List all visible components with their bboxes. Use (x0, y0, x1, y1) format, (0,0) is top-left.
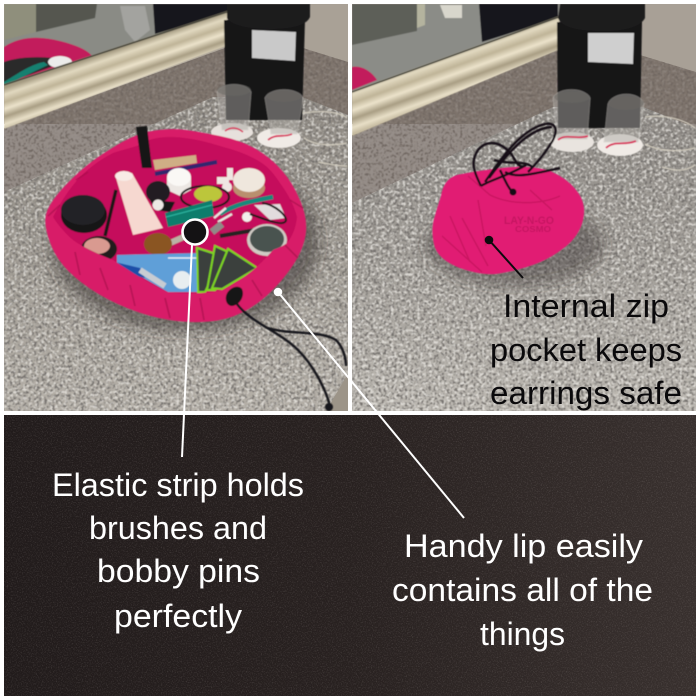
backsplash (352, 50, 696, 203)
small black jar (146, 181, 170, 203)
text: internal zip pocket: earrings safe (490, 375, 682, 411)
bag folds (442, 176, 560, 272)
mirror frame (4, 11, 227, 129)
embossed logo: LAY-N-GO (504, 215, 554, 227)
yellow item (194, 186, 222, 202)
text: elastic strip: perfectly (114, 598, 242, 634)
text: handy lip: Handy lip easily (404, 528, 643, 564)
panel: closed bag photo (352, 4, 696, 411)
bag interior (53, 137, 297, 293)
bag shadow (425, 203, 605, 287)
charger cable (303, 112, 347, 166)
countertop (4, 97, 348, 411)
text: elastic strip: Elastic strip holds (52, 467, 304, 503)
black compact (60, 206, 108, 234)
embossed logo (504, 215, 554, 234)
bag contents (61, 155, 287, 292)
teal tool (220, 197, 273, 214)
lip folds (48, 172, 303, 320)
drinking glasses (211, 84, 303, 148)
powder compact (232, 184, 266, 199)
panel: open bag photo (4, 4, 348, 411)
tan tube (153, 155, 197, 170)
counter front corner (326, 374, 348, 411)
drinking glasses (550, 90, 644, 156)
text: handy lip: things (480, 616, 565, 652)
dark cord (250, 203, 286, 223)
white jar (167, 178, 191, 196)
blush (81, 236, 117, 262)
closed pink bag (432, 167, 584, 274)
dark loop (181, 186, 229, 208)
blue tube (115, 262, 145, 278)
blue card (117, 253, 200, 292)
wall (4, 4, 348, 124)
green case (165, 200, 214, 227)
black drawstring (474, 124, 560, 194)
reflected pink bag (352, 67, 377, 90)
countertop (352, 107, 696, 411)
text: internal zip pocket: Internal zip (503, 288, 669, 324)
text: elastic strip: brushes and (89, 510, 267, 546)
callout: elastic strip marker and leader (182, 220, 208, 457)
coffee maker (557, 4, 645, 128)
text: handy lip (392, 528, 653, 652)
black pencil (105, 190, 116, 236)
purple pen (155, 162, 217, 174)
coffee maker (224, 4, 310, 120)
text: elastic strip: bobby pins (97, 553, 260, 589)
white pills (217, 168, 233, 184)
text: internal zip pocket (490, 288, 682, 411)
makeup brush (170, 236, 186, 243)
text: elastic strip (52, 467, 304, 634)
bag shadow (50, 152, 320, 332)
mirror frame (352, 16, 559, 136)
text: handy lip: contains all of the (392, 572, 653, 608)
open pink bag (45, 126, 306, 322)
wall (352, 4, 696, 124)
green cards (195, 246, 214, 294)
black elastic strap (136, 126, 152, 168)
backsplash (4, 48, 348, 192)
callout: zip pocket marker and leader (485, 236, 523, 278)
charger cable (645, 116, 695, 170)
round mirror (247, 224, 287, 256)
drawstring cord (237, 304, 346, 406)
pink tube (116, 173, 163, 235)
text: internal zip pocket: pocket keeps (490, 332, 682, 368)
cord lock (226, 287, 243, 306)
mirror reflection (352, 4, 560, 93)
callout: handy lip marker and leader (274, 288, 464, 518)
mirror reflection (4, 4, 227, 86)
reflected pink bag (4, 38, 93, 85)
panel: dark text background (4, 415, 696, 696)
tweezers (219, 228, 254, 238)
white card (254, 204, 286, 220)
embossed logo: COSMO (515, 225, 551, 234)
